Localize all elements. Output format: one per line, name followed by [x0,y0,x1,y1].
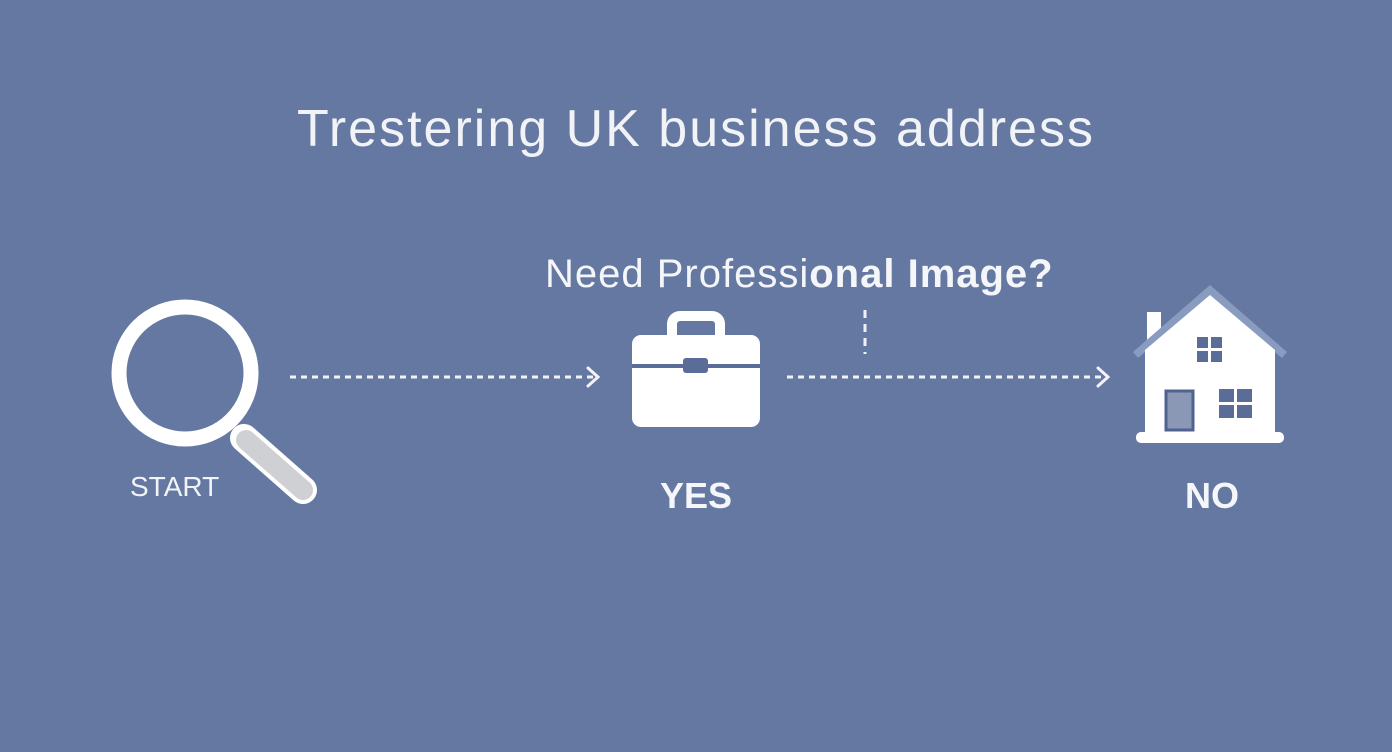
label: start: START [130,471,219,502]
label: no: NO [1185,475,1239,516]
arrow: start to yes [290,368,598,386]
icon: magnifier (start) [119,307,303,490]
question heading: Need Professional Image? [545,252,1054,296]
label: yes: YES [660,475,732,516]
arrow: yes to no [787,368,1108,386]
icon: briefcase [632,316,760,427]
dashed connector from question [864,310,866,354]
icon: house [1133,285,1287,443]
title: Trestering UK business address [297,100,1095,158]
